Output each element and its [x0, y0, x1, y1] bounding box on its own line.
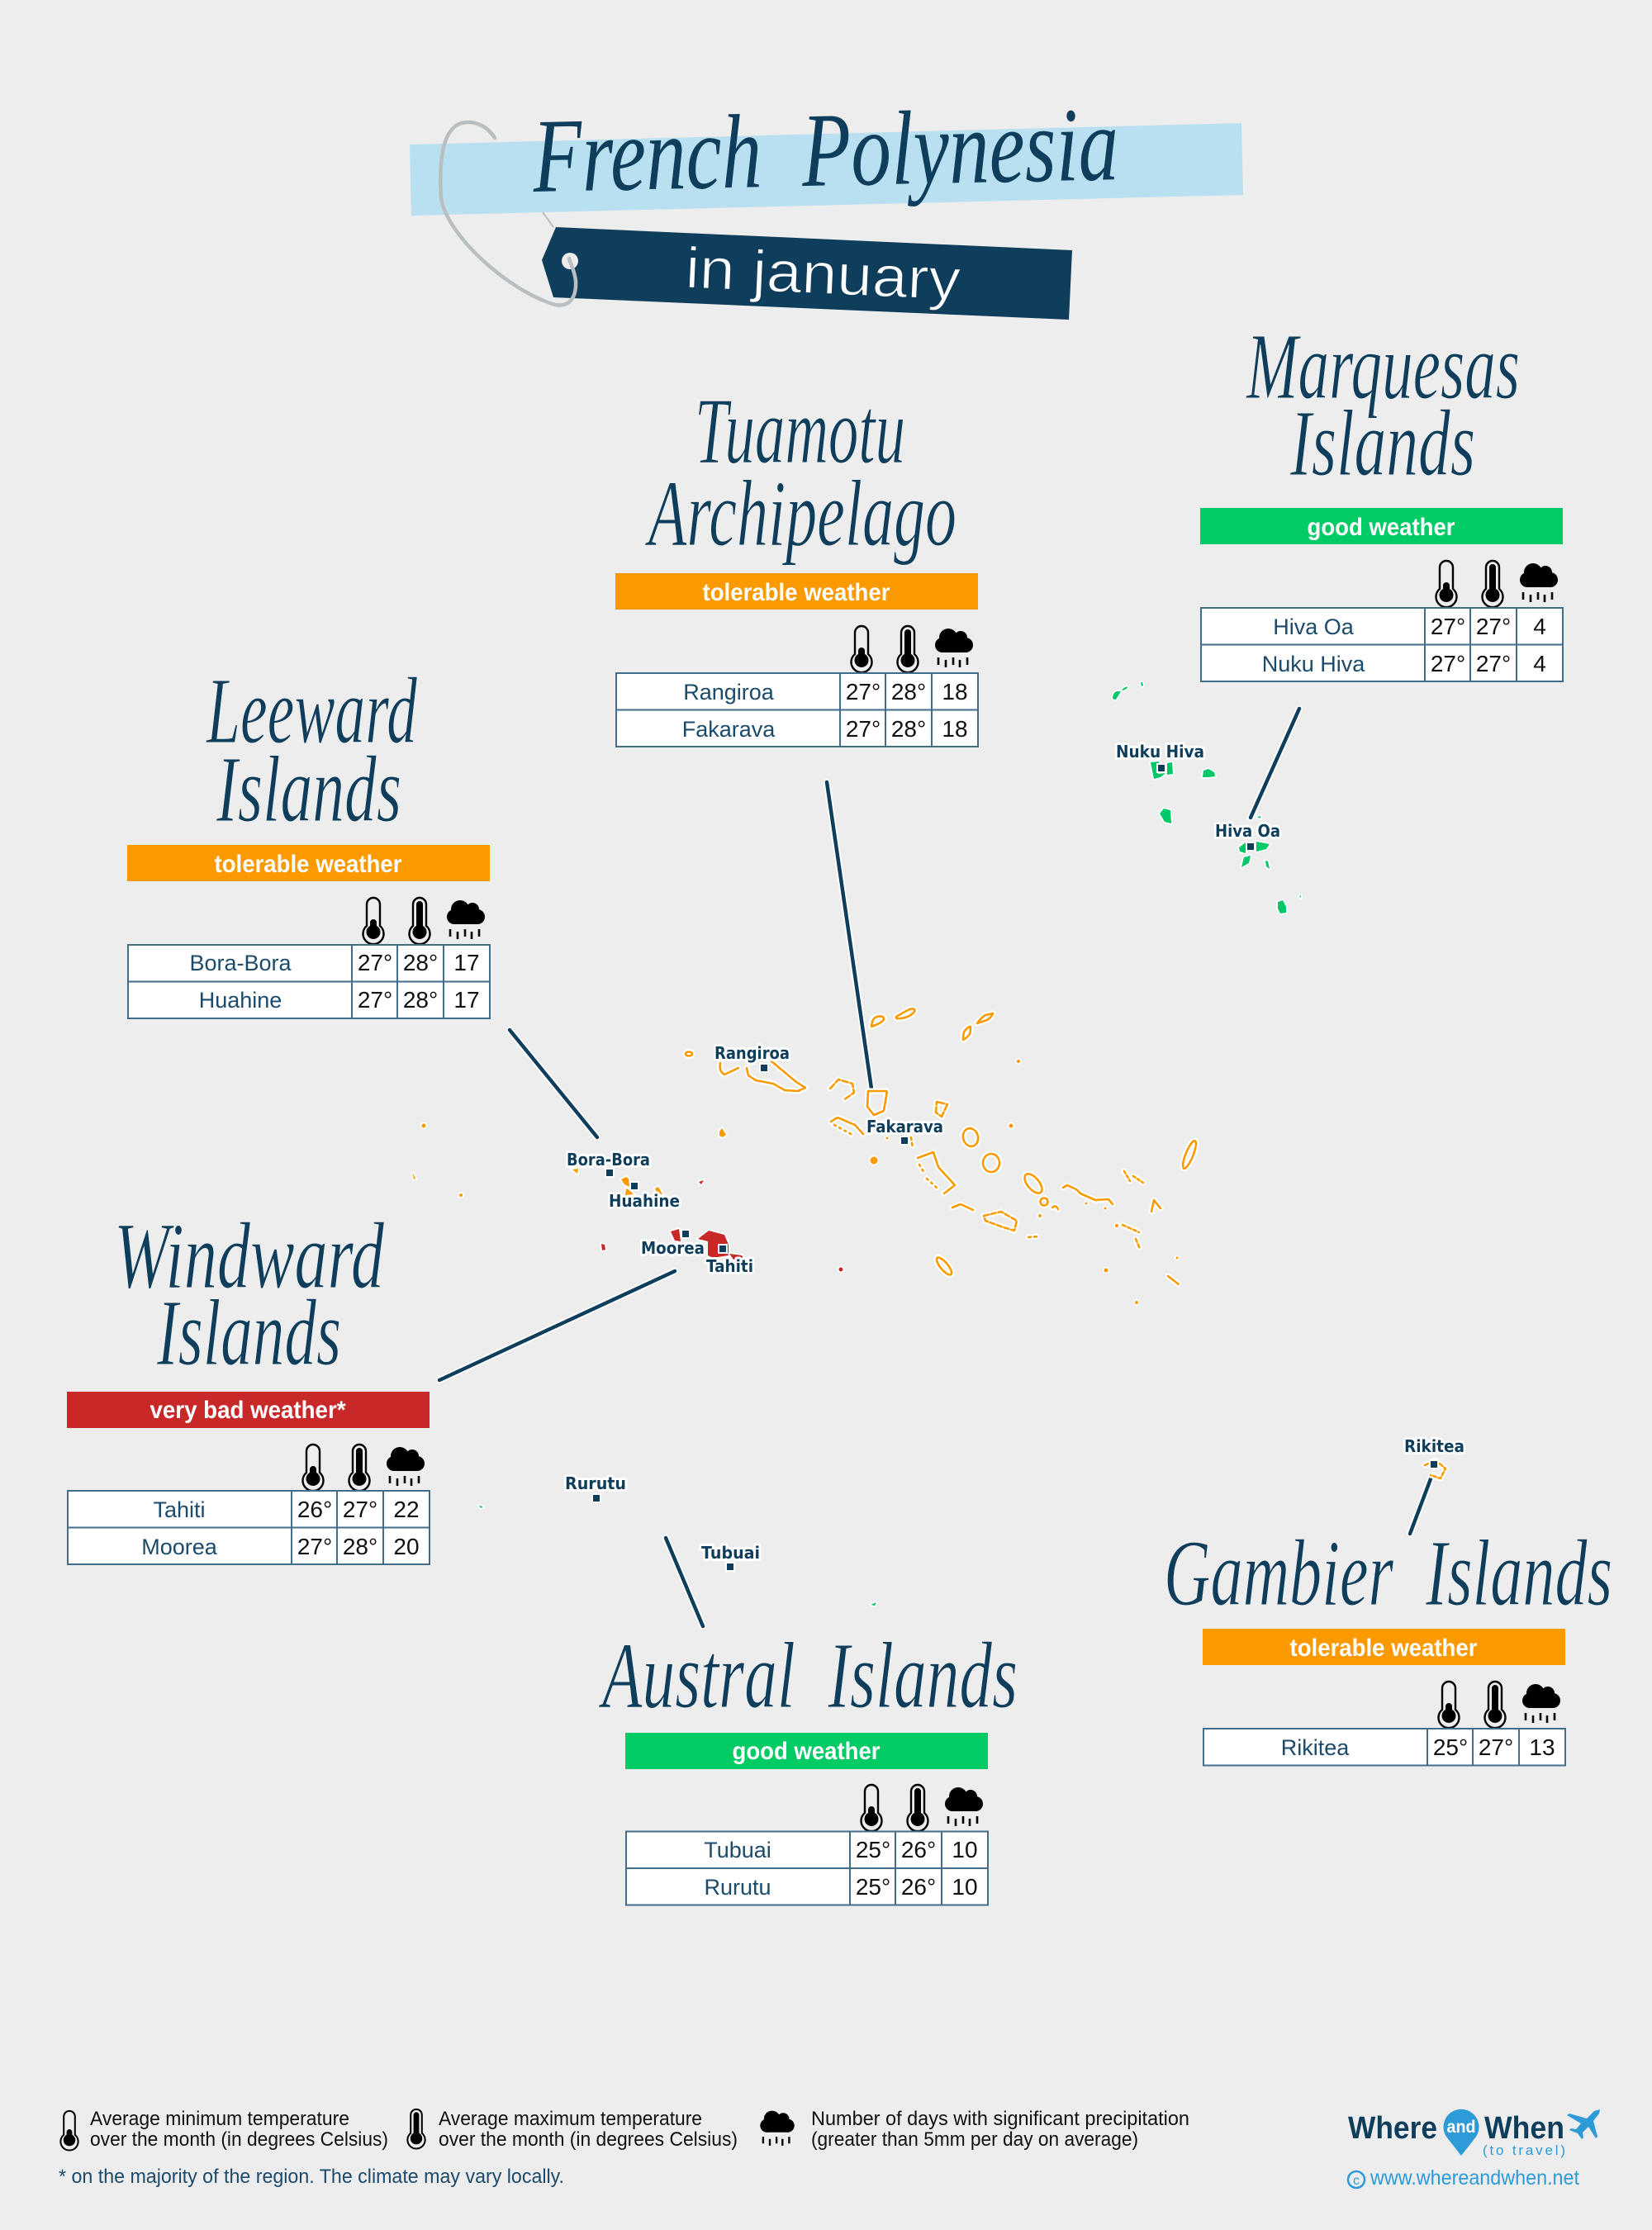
table: Tuamotu: 18: [942, 716, 968, 742]
panel: Windward Islands: [67, 1392, 430, 1564]
table: Gambier: [1203, 1729, 1565, 1766]
table: Marquesas: 4: [1533, 651, 1546, 676]
panel: Tuamotu Archipelago: [615, 573, 978, 747]
table: Windward: 20: [393, 1534, 420, 1559]
panel: Leeward Islands: [127, 845, 490, 1018]
Marquesas islands: [479, 682, 1301, 1606]
legend: [59, 2108, 1189, 2188]
map labels: Rangiroa: [714, 1043, 790, 1063]
heading: Leeward Islands: Leeward: [206, 658, 418, 763]
icons: min, max, rain: [1436, 561, 1558, 607]
table: Windward: 22: [393, 1497, 420, 1522]
legend: precipitation: [760, 2108, 1189, 2151]
copyright and website: www.whereandwhen.net: [1370, 2166, 1579, 2190]
heading: Tuamotu Archipelago: Archipelago: [644, 461, 957, 566]
icon: plane: [1567, 2109, 1600, 2139]
title banner: [410, 122, 1243, 320]
table: Windward: Tahiti: [153, 1497, 206, 1522]
map labels: Tubuai: [701, 1543, 760, 1563]
heading: Marquesas Islands: [1246, 314, 1520, 496]
logo: Where and When: (to travel): [1483, 2142, 1565, 2158]
weather bar: tolerable: [127, 845, 490, 881]
table: Windward: 28°: [343, 1534, 377, 1559]
legend: minimum temperature: over the month (in degrees Celsius): [90, 2128, 388, 2151]
legend: maximum temperature: Average maximum temperature: [439, 2108, 702, 2130]
map labels: Tahiti: [706, 1256, 753, 1276]
table: Marquesas: 27°: [1476, 651, 1511, 676]
table: Austral: 25°: [856, 1874, 890, 1900]
legend: minimum temperature: [60, 2108, 388, 2151]
table: Leeward: 27°: [358, 987, 392, 1013]
weather bar: very bad: [67, 1392, 430, 1428]
table: Marquesas: 27°: [1431, 614, 1465, 639]
table: Leeward: 28°: [403, 950, 438, 975]
heading: Windward Islands: Windward: [114, 1203, 385, 1308]
logo: Where and When: Where: [1348, 2111, 1437, 2146]
map labels: Hiva Oa: [1215, 821, 1280, 841]
icons: min, max, rain: [861, 1785, 983, 1831]
table: Austral: 10: [952, 1874, 978, 1900]
table: Gambier: 13: [1529, 1734, 1555, 1760]
Leeward and small orange islands: [412, 1060, 1178, 1304]
table: Tuamotu: 28°: [891, 679, 926, 705]
copyright and website: c: [1353, 2174, 1360, 2188]
table: Marquesas: 4: [1533, 614, 1546, 639]
table: Austral: 10: [952, 1837, 978, 1862]
panel: Marquesas Islands: [1200, 508, 1563, 681]
icon: map pin: and: [1447, 2118, 1475, 2137]
logo: Where and When: [1348, 2109, 1600, 2190]
weather bar: tolerable: tolerable weather: [702, 579, 890, 606]
table: Windward: Moorea: [141, 1535, 218, 1559]
panel: Austral Islands: [625, 1733, 988, 1905]
table: Austral: 26°: [901, 1837, 936, 1862]
legend: maximum temperature: [407, 2108, 738, 2151]
subtitle: in january: in january: [684, 235, 961, 312]
weather bar: tolerable: tolerable weather: [215, 851, 402, 878]
table: Austral: 25°: [856, 1837, 890, 1862]
logo: Where and When: When: [1484, 2111, 1564, 2146]
heading: Windward Islands: Islands: [156, 1280, 341, 1385]
connector lines: [439, 709, 1431, 1626]
icons: min, max, rain: [851, 626, 973, 672]
table: Tuamotu: 27°: [846, 679, 881, 705]
weather bar: good: [625, 1733, 988, 1769]
table: Tuamotu: Rangiroa: [683, 680, 775, 705]
icons: min, max, rain: [1439, 1682, 1560, 1728]
weather bar: very bad: very bad weather*: [150, 1397, 346, 1424]
icons: min, max, rain: [302, 1445, 425, 1491]
Tuamotu atolls: [686, 1008, 1446, 1478]
weather bar: tolerable: tolerable weather: [1290, 1635, 1478, 1662]
table: Windward: 26°: [297, 1497, 332, 1522]
table: Leeward: 17: [453, 987, 480, 1013]
legend: precipitation: (greater than 5mm per day on average): [811, 2128, 1138, 2151]
table: Tuamotu: 27°: [846, 716, 881, 742]
map labels: Moorea: [641, 1238, 705, 1258]
heading: Tuamotu Archipelago: [644, 378, 957, 566]
table: Leeward: Bora-Bora: [189, 951, 292, 975]
footnote: * on the majority of the region. The climate may vary locally.: [59, 2166, 564, 2188]
table: Austral: Rurutu: [704, 1875, 771, 1900]
map labels: Rikitea: [1404, 1436, 1464, 1456]
heading: Windward Islands: [114, 1203, 385, 1385]
table: Gambier: 27°: [1479, 1734, 1513, 1760]
heading: Austral Islands: Austral Islands: [598, 1623, 1018, 1728]
map labels: Rurutu: [565, 1473, 626, 1493]
table: Marquesas: [1201, 608, 1563, 681]
table: Austral: Tubuai: [704, 1838, 771, 1862]
legend: maximum temperature: over the month (in degrees Celsius): [439, 2128, 738, 2151]
weather bar: good: [1200, 508, 1563, 544]
map labels: Huahine: [609, 1191, 680, 1211]
heading: Leeward Islands: [206, 658, 418, 842]
table: Gambier: Rikitea: [1281, 1735, 1350, 1760]
table: Windward: [68, 1491, 430, 1564]
map labels: Nuku Hiva: [1116, 742, 1204, 762]
heading: Marquesas Islands: Marquesas: [1246, 314, 1520, 419]
table: Tuamotu: 18: [942, 679, 968, 705]
map labels: Fakarava: [866, 1117, 943, 1136]
table: Leeward: 27°: [358, 950, 392, 975]
heading: Tuamotu Archipelago: Tuamotu: [695, 378, 905, 483]
table: Tuamotu: Fakarava: [682, 717, 776, 742]
table: Leeward: Huahine: [199, 988, 282, 1013]
table: Tuamotu: [616, 673, 978, 747]
table: Gambier: 25°: [1433, 1734, 1468, 1760]
map: islands and connector lines: [412, 682, 1464, 1626]
table: Leeward: [128, 945, 490, 1018]
weather bar: tolerable: [615, 573, 978, 610]
table: Marquesas: 27°: [1476, 614, 1511, 639]
legend: precipitation: Number of days with significant precipitation: [811, 2108, 1189, 2130]
table: Leeward: 17: [453, 950, 480, 975]
icons: min, max, rain: [363, 898, 485, 944]
table: Windward: 27°: [343, 1497, 377, 1522]
table: Marquesas: Hiva Oa: [1273, 614, 1355, 639]
table: Marquesas: 27°: [1431, 651, 1465, 676]
title: French Polynesia: French Polynesia: [531, 85, 1119, 215]
map labels: Bora-Bora: [567, 1150, 650, 1170]
icon: map pin: [1443, 2109, 1479, 2156]
legend: minimum temperature: Average minimum temperature: [90, 2108, 349, 2130]
table: Austral: [626, 1832, 988, 1905]
weather bar: good: good weather: [1307, 514, 1455, 541]
weather bar: good: good weather: [732, 1738, 881, 1765]
heading: Marquesas Islands: Islands: [1289, 391, 1475, 496]
table: Tuamotu: 28°: [891, 716, 926, 742]
panel: Gambier Islands: [1203, 1629, 1565, 1766]
table: Austral: 26°: [901, 1874, 936, 1900]
heading: Leeward Islands: Islands: [216, 737, 401, 842]
map labels: [565, 742, 1464, 1563]
table: Marquesas: Nuku Hiva: [1262, 652, 1365, 676]
Windward islands (Tahiti, Moorea): [601, 1180, 843, 1272]
table: Leeward: 28°: [403, 987, 438, 1013]
weather bar: tolerable: [1203, 1629, 1565, 1665]
table: Windward: 27°: [297, 1534, 332, 1559]
city markers: [592, 764, 1438, 1571]
